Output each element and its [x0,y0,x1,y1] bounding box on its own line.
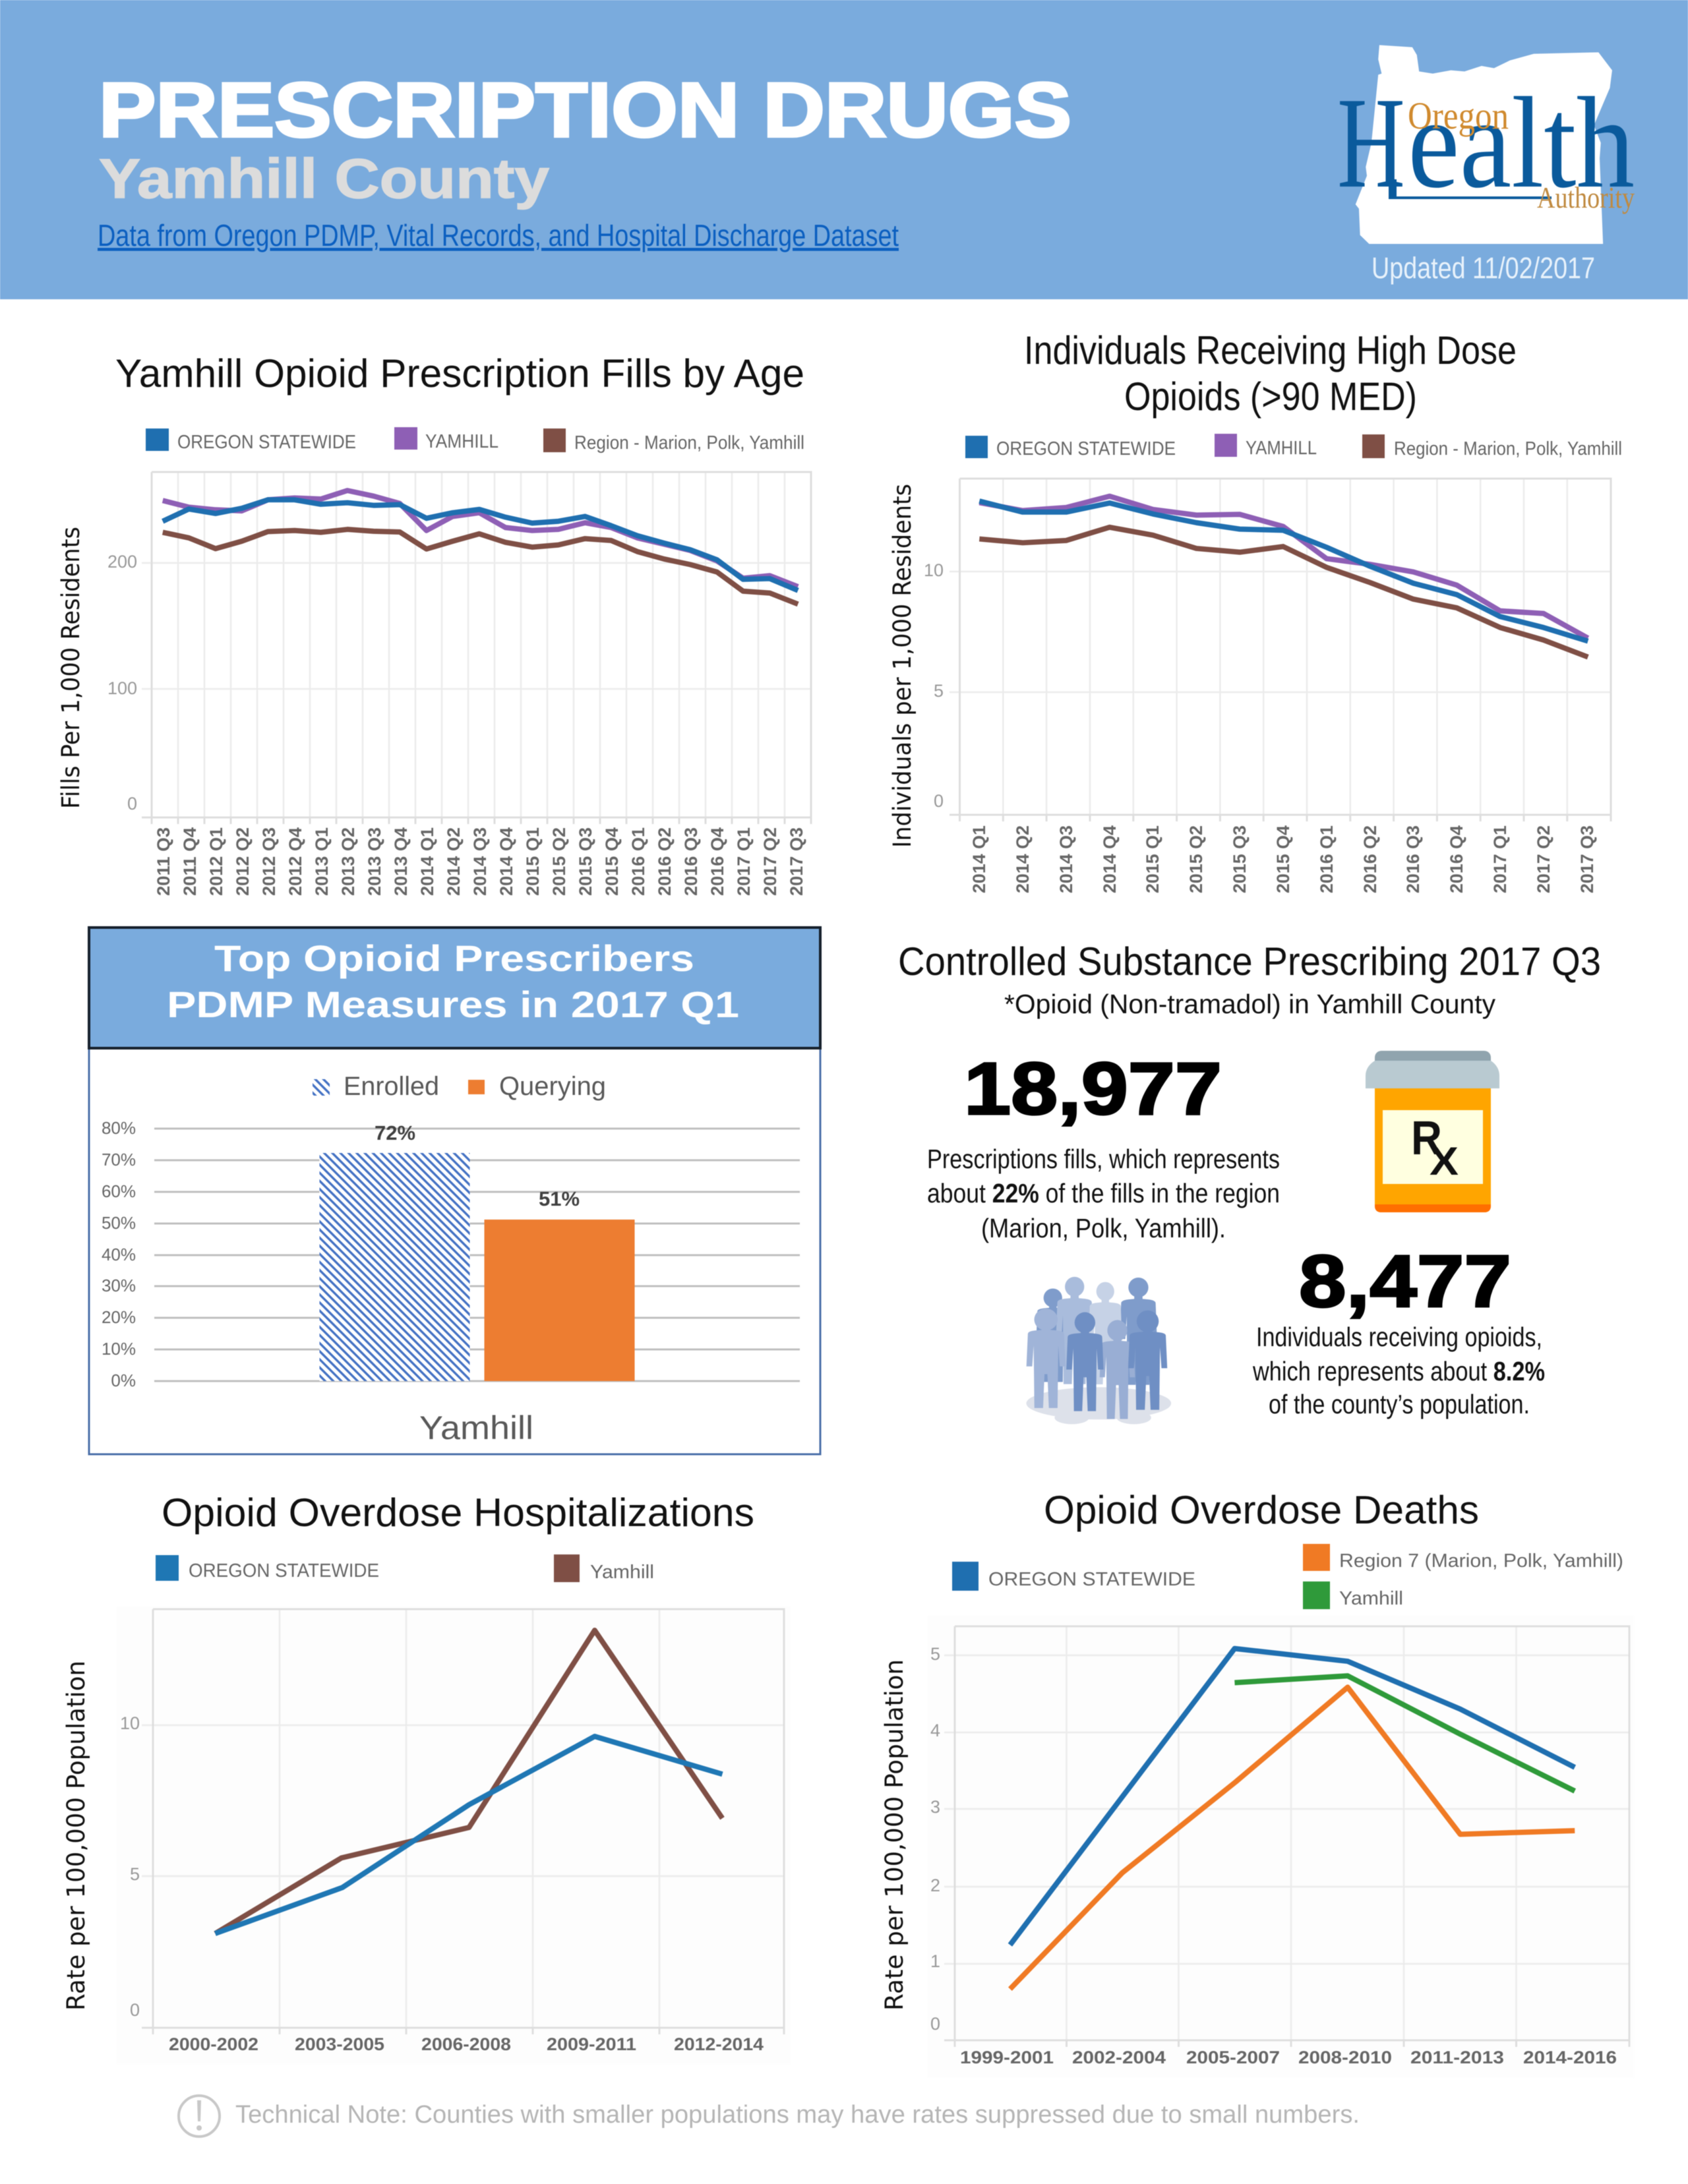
logo: Oregon Health Authority: ealth [1408,71,1635,215]
x axis labels [960,2048,1617,2067]
panel: top opioid prescribers PDMP measures [89,928,820,1454]
legend: OREGON STATEWIDE [988,1569,1195,1590]
x axis quarter labels: 2012 Q2 [233,827,253,896]
x axis quarter labels: 2014 Q4 [1100,825,1120,893]
y axis tick labels [930,1644,940,2034]
x axis quarter labels: 2017 Q1 [1490,825,1510,893]
gridlines and axis labels: 50% [102,1213,136,1233]
icon: Rx pill bottle [1366,1051,1499,1212]
x axis quarter labels: 2015 Q3 [576,827,595,896]
title: PRESCRIPTION DRUGS [99,67,1071,153]
x axis labels: 2014-2016 [1523,2048,1617,2067]
x axis quarter labels: 2014 Q3 [470,827,490,896]
x axis quarter labels: 2012 Q4 [286,827,305,896]
bar: querying 51% [484,1187,634,1381]
data source link: Data from Oregon PDMP, Vital Records, and Hospital Discharge Dataset [98,218,899,252]
stat: individuals receiving opioids [1252,1240,1545,1419]
x axis quarter labels: 2016 Q1 [1317,825,1337,893]
y axis tick labels: 2 [930,1875,940,1895]
bar: enrolled 72% [319,1121,469,1381]
x axis quarter labels: 2015 Q1 [523,827,543,896]
x axis labels [169,2034,764,2054]
y axis tick labels: 4 [930,1721,940,1740]
bar: querying 51%: 51% [539,1187,580,1210]
x axis quarter labels: 2016 Q2 [1360,825,1380,893]
x axis labels: 2005-2007 [1186,2048,1280,2067]
legend: Region - Marion, Polk, Yamhill [574,432,804,454]
gridlines and axis labels: 10% [102,1339,136,1359]
section: controlled substance prescribing [898,939,1601,1424]
x axis quarter labels: 2014 Q1 [417,827,437,896]
y axis tick labels: 5 [930,1644,940,1664]
stat: individuals receiving opioids: 8,477 [1299,1240,1511,1322]
y axis tick labels [924,560,944,811]
chart title: Yamhill Opioid Prescription Fills by Age [115,351,804,396]
y axis tick labels [107,552,137,813]
x axis quarter labels: 2014 Q2 [1013,825,1033,893]
x axis quarter labels: 2013 Q3 [365,827,384,896]
legend: YAMHILL [1246,438,1317,459]
x axis quarter labels: 2013 Q2 [338,827,358,896]
panel header [89,928,820,1048]
x axis quarter labels: 2017 Q2 [1534,825,1553,893]
bar: enrolled 72%: 72% [375,1121,415,1144]
y axis tick labels: 3 [930,1797,940,1817]
icon: group of people [1026,1277,1171,1424]
subtitle: Yamhill County [99,148,549,210]
x axis quarter labels: 2011 Q4 [180,827,200,896]
chart title: Opioid Overdose Deaths [1044,1488,1479,1532]
x axis labels: 2012-2014 [674,2034,764,2054]
x axis quarter labels: 2011 Q3 [154,827,173,896]
stat: prescription fills: 18,977 [964,1048,1222,1130]
y axis tick labels: 5 [130,1864,140,1884]
legend: Querying [499,1072,606,1101]
y axis tick labels: 0 [934,791,944,811]
stat: prescription fills: (Marion, Polk, Yamhill). [981,1213,1226,1243]
y axis tick labels: 1 [930,1951,940,1971]
x axis quarter labels: 2017 Q3 [787,827,806,896]
x axis quarter labels: 2012 Q1 [206,827,226,896]
x axis quarter labels [154,827,806,896]
section title: Controlled Substance Prescribing 2017 Q3 [898,939,1601,984]
y axis tick labels: 200 [107,552,137,572]
y axis tick labels [120,1713,140,2020]
data lines [1010,1649,1575,1989]
x axis quarter labels: 2016 Q4 [1447,825,1466,893]
x axis quarter labels: 2015 Q4 [602,827,622,896]
y axis title: Fills Per 1,000 Residents [57,527,85,809]
legend: Region 7 (Marion, Polk, Yamhill) [1339,1550,1623,1572]
x axis labels: 2006-2008 [421,2034,511,2054]
x axis quarter labels: 2016 Q4 [708,827,727,896]
legend: Yamhill [1339,1588,1403,1609]
y axis title: Rate per 100,000 Population [880,1659,909,2011]
y axis title: Individuals per 1,000 Residents [888,484,917,848]
gridlines and axis labels [102,1118,800,1390]
x axis quarter labels: 2017 Q1 [734,827,754,896]
x axis labels: 2002-2004 [1072,2048,1166,2067]
y axis tick labels: 0 [127,794,137,813]
x axis quarter labels: 2016 Q2 [655,827,675,896]
x axis labels: 2009-2011 [547,2034,636,2054]
x axis quarter labels: 2016 Q3 [1403,825,1423,893]
gridlines and axis labels: 60% [102,1181,136,1201]
legend [156,1554,654,1583]
y axis tick labels: 0 [930,2014,940,2034]
x axis quarter labels: 2016 Q3 [681,827,701,896]
x axis quarter labels: 2015 Q2 [1186,825,1206,893]
note text: Technical Note: Counties with smaller populations may have rates suppressed due to small numbers. [235,2101,1360,2129]
gridlines and axis labels: 40% [102,1245,136,1264]
x axis quarter labels: 2015 Q4 [1273,825,1293,893]
x axis labels: 2000-2002 [169,2034,258,2054]
updated date: Updated 11/02/2017 [1372,251,1595,285]
legend [313,1072,606,1101]
icon: exclamation circle [179,2096,220,2137]
x axis quarter labels [969,825,1597,893]
plot grid [142,472,811,824]
legend [146,427,804,454]
legend: Region - Marion, Polk, Yamhill [1394,438,1622,459]
chart: opioid overdose deaths [880,1488,1634,2078]
legend: Yamhill [590,1562,654,1583]
logo: Oregon Health Authority [1337,45,1635,244]
x axis labels: 2008-2010 [1298,2048,1392,2067]
x axis quarter labels: 2015 Q2 [549,827,569,896]
x axis labels: 2011-2013 [1410,2048,1504,2067]
data lines [979,496,1588,657]
gridlines and axis labels: 70% [102,1150,136,1169]
y axis tick labels: 10 [924,560,944,580]
chart title: Opioid Overdose Hospitalizations [162,1490,754,1535]
chart title: Opioids (>90 MED) [1124,374,1417,419]
chart title [1024,328,1517,419]
plot grid [928,1616,1634,2078]
x axis labels: 1999-2001 [960,2048,1054,2067]
legend: OREGON STATEWIDE [996,438,1176,459]
x axis quarter labels: 2013 Q1 [312,827,332,896]
x axis quarter labels: 2014 Q1 [969,825,989,893]
x axis quarter labels: 2017 Q2 [760,827,780,896]
stat: prescription fills [927,1048,1280,1243]
chart: individuals receiving high dose opioids [888,328,1622,893]
x axis quarter labels: 2013 Q4 [391,827,411,896]
stat: individuals receiving opioids: which represents about 8.2% [1252,1356,1545,1386]
x axis quarter labels: 2014 Q3 [1056,825,1076,893]
stat: prescription fills: Prescriptions fills, which represents [927,1144,1280,1174]
gridlines and axis labels: 20% [102,1307,136,1327]
legend: OREGON STATEWIDE [189,1560,379,1581]
stat: individuals receiving opioids: Individuals receiving opioids, [1256,1322,1542,1352]
section subtitle: *Opioid (Non-tramadol) in Yamhill County [1004,989,1495,1019]
logo: Oregon Health Authority: Authority [1537,181,1635,214]
legend: Enrolled [344,1072,439,1101]
icon: Rx pill bottle: R [1411,1112,1442,1165]
legend [965,434,1622,459]
technical note [179,2096,1360,2137]
legend [952,1544,1623,1609]
x axis quarter labels: 2012 Q3 [259,827,279,896]
stat: prescription fills: about 22% of the fills in the region [927,1178,1280,1208]
chart title: Individuals Receiving High Dose [1024,328,1517,372]
chart: opioid overdose hospitalizations [62,1490,791,2064]
logo: Oregon Health Authority: Oregon [1408,94,1509,137]
gridlines and axis labels: 80% [102,1118,136,1138]
x axis quarter labels: 2015 Q3 [1230,825,1250,893]
x axis quarter labels: 2015 Q1 [1143,825,1162,893]
x axis quarter labels: 2017 Q3 [1577,825,1597,893]
header banner [0,0,1688,299]
gridlines and axis labels: 30% [102,1276,136,1295]
panel header: Top Opioid Prescribers [214,937,694,979]
panel header: PDMP Measures in 2017 Q1 [167,984,739,1025]
y axis tick labels: 5 [934,681,944,701]
x axis labels: 2003-2005 [295,2034,384,2054]
x axis quarter labels: 2014 Q4 [497,827,516,896]
plot grid [950,479,1611,821]
data lines [215,1630,723,1933]
chart: opioid prescription fills by age [57,351,811,896]
legend: YAMHILL [425,431,498,452]
y axis tick labels: 0 [130,2000,140,2020]
logo: Oregon Health Authority: H [1337,71,1405,215]
category label: Yamhill [419,1409,533,1446]
y axis tick labels: 100 [107,678,137,698]
data lines [163,490,798,604]
x axis quarter labels: 2016 Q1 [628,827,648,896]
y axis tick labels: 10 [120,1713,140,1733]
y axis title: Rate per 100,000 Population [62,1661,90,2011]
icon: Rx pill bottle: X [1430,1139,1459,1183]
stat: individuals receiving opioids: of the county’s population. [1269,1389,1530,1419]
legend: OREGON STATEWIDE [177,432,356,453]
x axis quarter labels: 2014 Q2 [444,827,464,896]
plot grid [117,1607,791,2064]
gridlines and axis labels: 0% [111,1371,136,1390]
